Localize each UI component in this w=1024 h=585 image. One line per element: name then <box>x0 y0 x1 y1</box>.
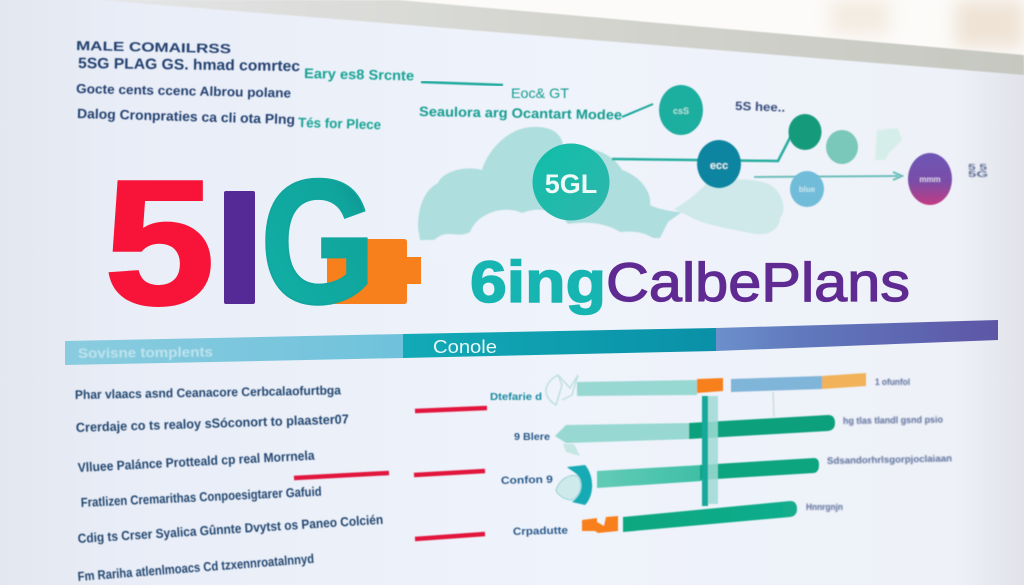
diagram label: 5G <box>968 162 989 179</box>
bar right labels: hg tlas tlandl gsnd psio <box>843 415 943 427</box>
node: light blue <box>790 171 824 207</box>
diagram label: 5G: 5 5 <box>968 162 987 172</box>
main title: 6ing <box>470 250 606 315</box>
node: purple: mmm <box>919 175 941 184</box>
left list: Phar vlaacs asnd Ceanacore Cerbcalaofurtbga <box>75 383 342 402</box>
cloud illustration <box>418 127 784 262</box>
left list: Vlluee Palánce Protteald cp real Morrnela <box>77 448 316 475</box>
node: green <box>788 114 822 150</box>
bar left labels <box>490 391 568 538</box>
left list <box>75 383 384 584</box>
band: left segment <box>65 334 403 365</box>
row 4 bar <box>623 501 797 532</box>
battery icon <box>327 239 421 304</box>
intro text block: Gocte cents ccenc Albrou polane <box>76 81 291 101</box>
main title <box>470 250 910 315</box>
intro text block: Eary es8 Srcnte <box>304 65 414 83</box>
diagram label: 5G: 5G <box>968 169 989 179</box>
icon: arrow tail row 2 <box>563 444 580 456</box>
node: dark teal: ecc <box>710 160 728 172</box>
bar left labels: Dtefarie d <box>490 391 542 403</box>
left list: Crerdaje co ts realoy sSóconort to plaaster07 <box>76 411 349 435</box>
faded shape <box>875 128 902 160</box>
node: light green <box>826 130 858 164</box>
hero logo: 5G with battery <box>104 142 421 342</box>
red connector lines <box>294 408 487 539</box>
intro text block: Tés for Plece <box>298 115 382 132</box>
node: 5GL <box>532 144 610 220</box>
intro text block: Dalog Cronpraties ca cli ota Plng <box>77 106 295 127</box>
backdrop above the board <box>300 0 1024 60</box>
connector lines <box>612 104 902 180</box>
network diagram <box>532 85 989 220</box>
node: 5GL: 5GL <box>545 169 597 199</box>
board top frame <box>100 0 1024 75</box>
bar right labels <box>806 377 952 513</box>
header band <box>65 320 998 365</box>
node: top teal: csS <box>673 106 689 116</box>
intro text block: 5SG PLAG GS. hmad comrtec <box>78 55 300 75</box>
row 1 bars <box>577 373 866 396</box>
bar right labels: 1 ofunfol <box>875 377 910 388</box>
row 3 bars <box>597 458 819 488</box>
logo bar <box>224 191 255 304</box>
node: top teal <box>659 85 703 135</box>
left list: Cdig ts Crser Syalica Gûnnte Dvytst os Paneo Colcién <box>77 512 384 546</box>
icon: orange tab row 4 <box>582 516 618 533</box>
network labels: Eoc& GT <box>511 85 569 101</box>
bar right labels: Sdsandorhrlsgorpjoclaiaan <box>827 453 952 467</box>
diagram label: 5S hee: 5S hee.. <box>735 101 785 115</box>
teal underline <box>421 82 503 85</box>
network labels <box>419 85 623 123</box>
node: purple <box>908 153 952 205</box>
main title: CalbePlans <box>606 251 910 313</box>
bar left labels: Confon 9 <box>501 474 553 487</box>
band label center: Conole <box>433 337 497 357</box>
row 2 bars <box>555 415 835 443</box>
left list: Fratlizen Cremarithas Conpoesigtarer Gafuid <box>80 484 322 510</box>
bar left labels: Crpadutte <box>513 525 568 538</box>
icon: outline row 1 <box>546 375 578 405</box>
node: dark teal <box>697 140 741 188</box>
bar chart <box>546 373 866 533</box>
logo letter G: G <box>260 142 376 341</box>
intro text block: MALE COMAILRSS <box>76 38 232 56</box>
logo numeral 5: 5 <box>104 143 215 342</box>
icon: swirl row 3 <box>556 465 592 505</box>
network labels: Seaulora arg Ocantart Modee <box>419 104 623 123</box>
band: middle segment <box>403 328 716 358</box>
vertical connector <box>702 392 774 506</box>
band label left: Sovisne tomplents <box>78 344 213 361</box>
bar right labels: Hnnrgnjn <box>806 502 843 513</box>
bar left labels: 9 Blere <box>514 431 550 443</box>
left list: Fm Rariha atlenlmoacs Cd tzxennroatalnnyd <box>77 551 315 584</box>
intro text block <box>76 38 414 132</box>
node: light blue: blue <box>799 185 816 194</box>
band: right segment <box>716 320 998 351</box>
